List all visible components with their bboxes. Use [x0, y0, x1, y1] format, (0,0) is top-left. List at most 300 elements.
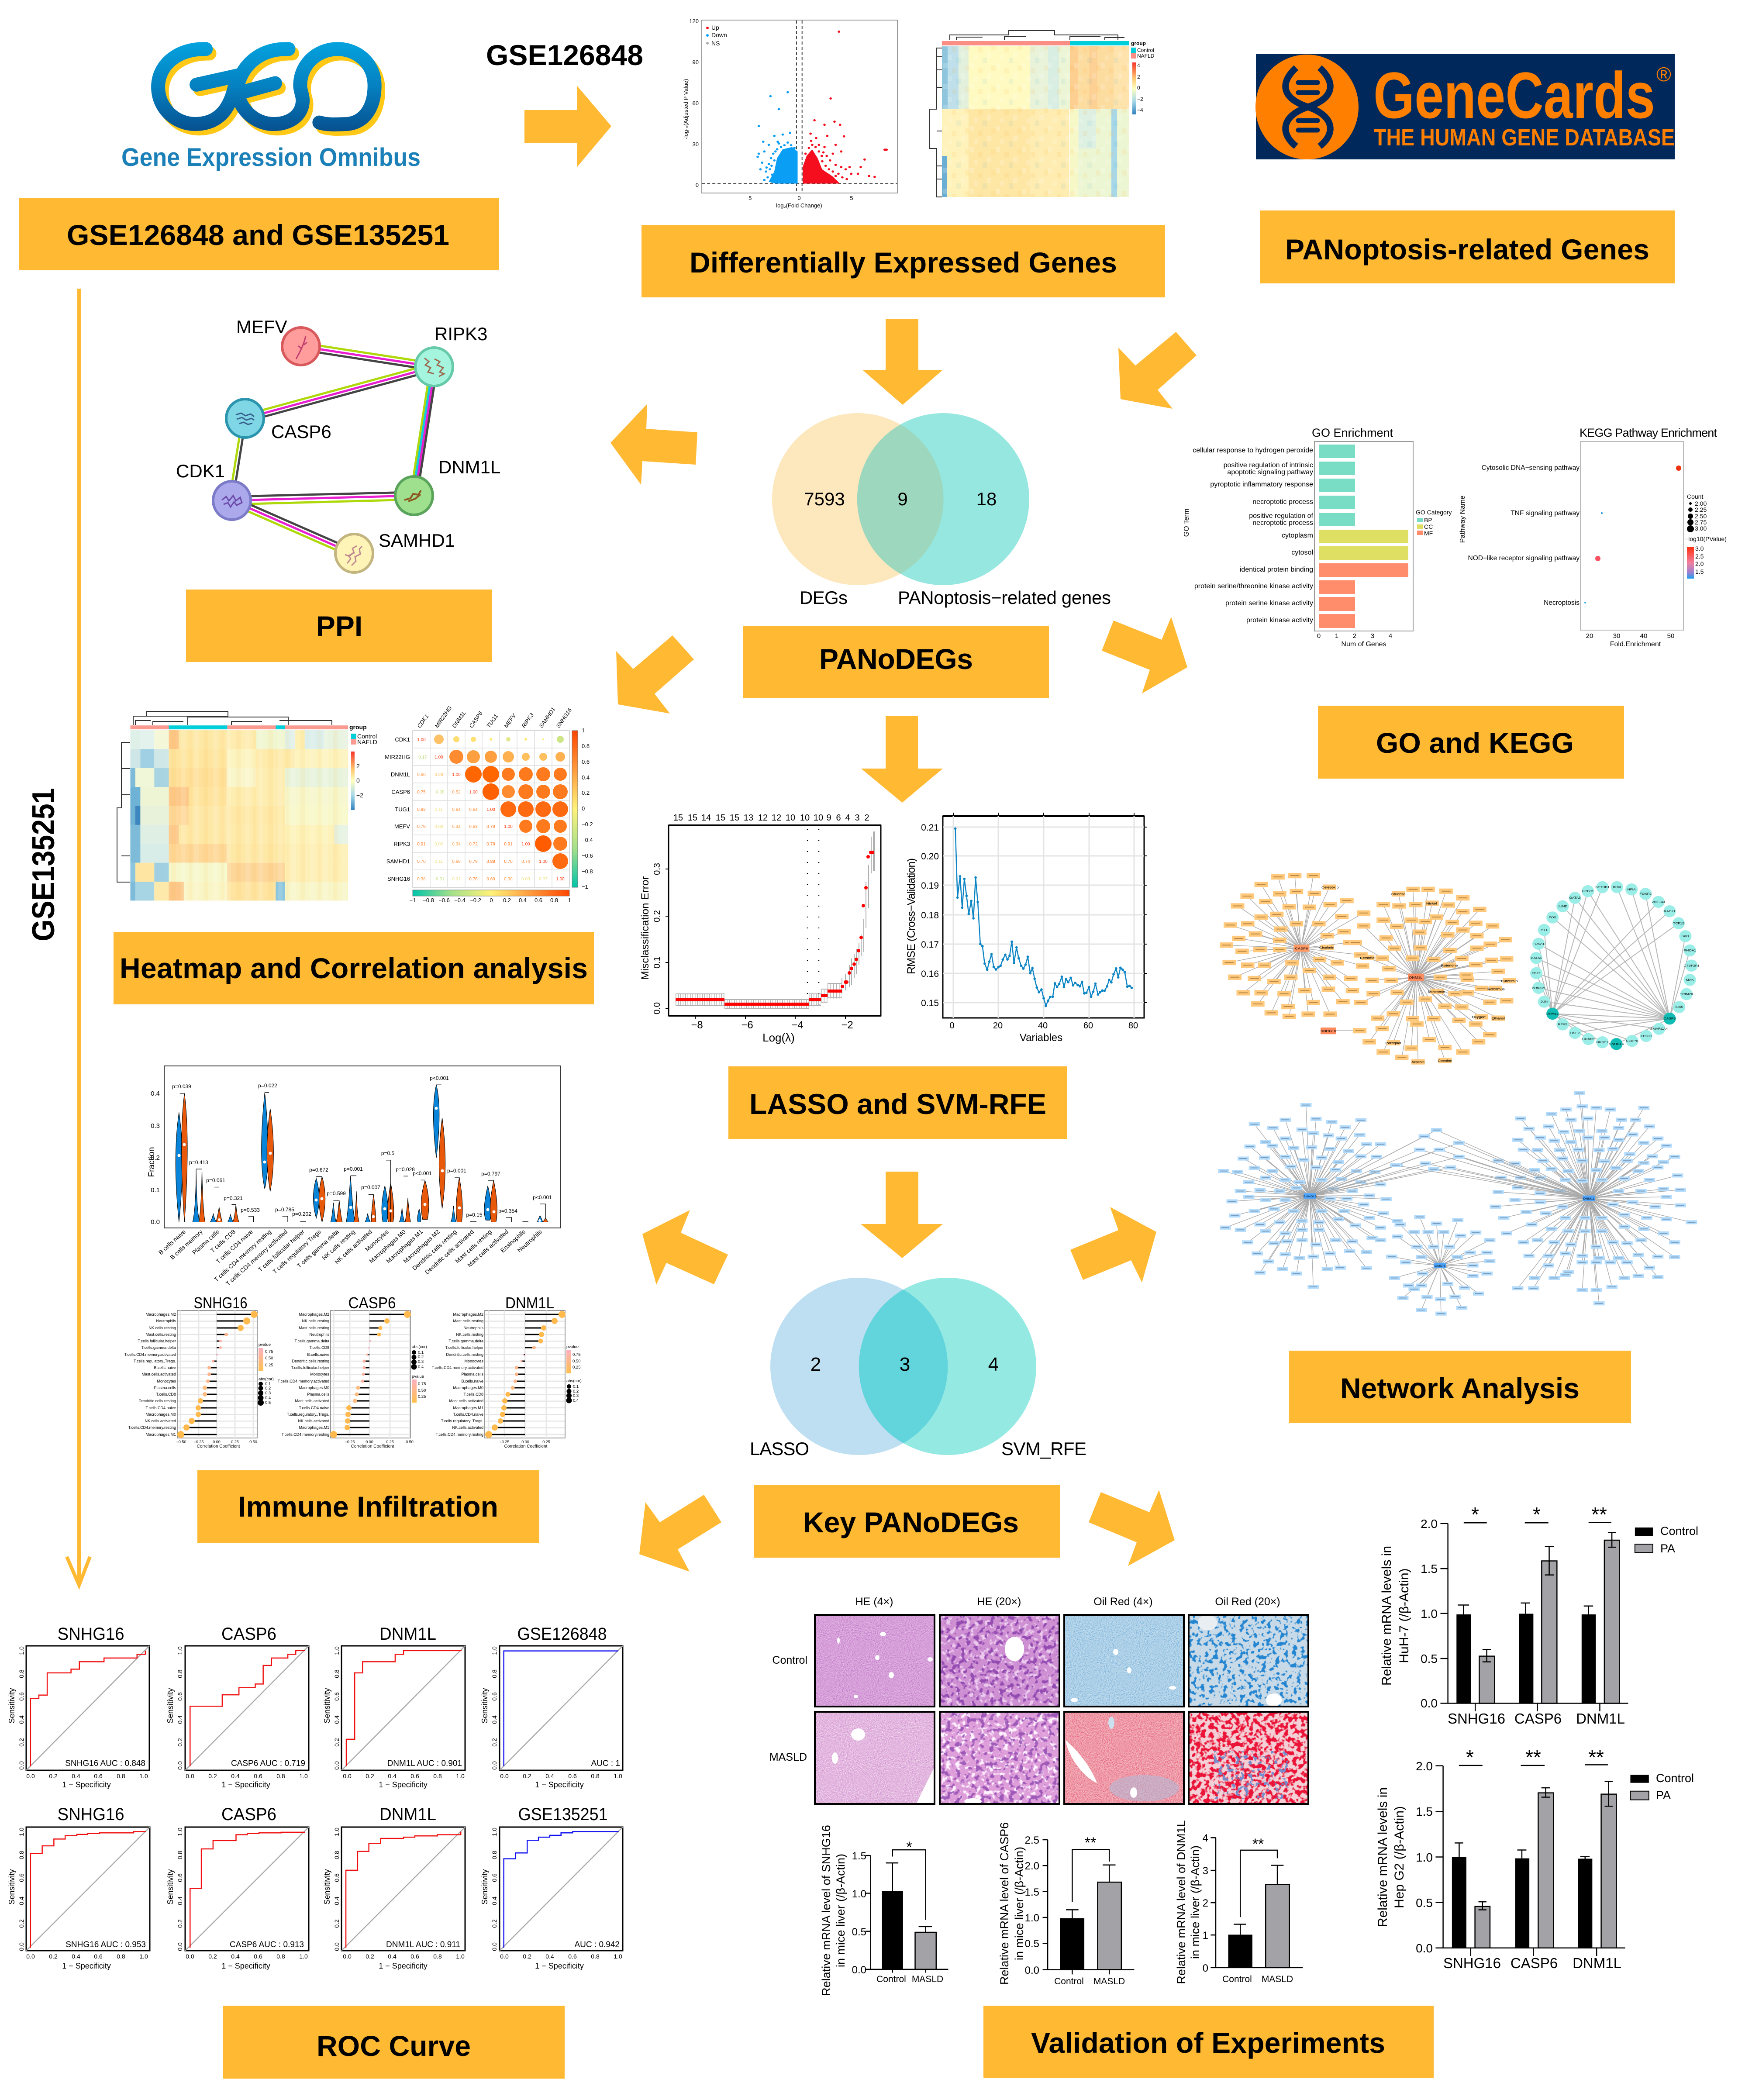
correlation matrix: 0.82: [417, 807, 426, 812]
lollipop chart: DNM1L: T.cells.CD4.memory.resting: [436, 1432, 483, 1437]
ROC curves: 1.0: [491, 1646, 498, 1655]
ROC curves: 0.4: [231, 1953, 240, 1960]
lollipop chart: CASP6: 0.75: [418, 1382, 426, 1386]
banner: GSE126848 and GSE135251: GSE126848 and GSE135251: [67, 219, 449, 251]
venn diagram: DEGs and PANoptosis genes: 18: [976, 489, 997, 509]
bar chart: HuH-7: DNM1L: [1576, 1710, 1625, 1727]
lollipop chart: CASP6: T.cells.CD8: [309, 1345, 329, 1350]
LASSO plot: −2: [841, 1019, 853, 1031]
heatmap: key genes: NAFLD: [357, 738, 377, 745]
network: transcription factors ring: SMARCA4: [1650, 1027, 1668, 1031]
venn diagram: LASSO and SVM-RFE: 4: [988, 1354, 999, 1375]
ROC curves: 1.0: [456, 1772, 465, 1779]
LASSO plot: 0.1: [652, 956, 662, 969]
network: transcription factors ring: HSF2: [1570, 1031, 1580, 1034]
ROC curves: 0.6: [491, 1692, 498, 1701]
ROC curves: 0.8: [276, 1953, 285, 1960]
correlation matrix: −0.8: [423, 897, 434, 903]
ROC curves: 0.2: [18, 1738, 25, 1747]
correlation matrix: 1.00: [539, 859, 548, 864]
ROC curves: 0.8: [18, 1851, 25, 1859]
bar chart: Hep G2: Control: [1656, 1772, 1694, 1785]
GO enrichment bar chart: protein serine kinase activity: [1225, 600, 1313, 607]
LASSO plot: 10: [800, 813, 810, 823]
lollipop chart: DNM1L: Macrophages.M0: [453, 1386, 483, 1390]
ROC curves: 0.0: [333, 1761, 340, 1770]
venn diagram: LASSO and SVM-RFE: 2: [810, 1354, 821, 1375]
KEGG pathway enrichment dot plot: −log10(PValue): [1685, 535, 1727, 542]
lollipop chart: CASP6: 0.50: [406, 1440, 414, 1444]
bar chart: HuH-7: PA: [1660, 1542, 1675, 1555]
ROC curves: 0.8: [333, 1669, 340, 1678]
arrow: down-left to ROC: [639, 1495, 721, 1572]
lollipop chart: DNM1L: 0.00: [521, 1440, 529, 1444]
correlation matrix: −0.8: [582, 868, 593, 875]
LASSO plot: 12: [758, 813, 768, 823]
banner: GO and KEGG: [1318, 706, 1624, 779]
ROC curves: CASP6: [221, 1805, 276, 1824]
violin plot: immune cell fractions: B cells naive: [157, 1228, 187, 1256]
KEGG pathway enrichment dot plot: 2.00: [1695, 500, 1707, 507]
correlation matrix: 0.03: [435, 824, 443, 829]
correlation matrix: 0.88: [486, 859, 495, 864]
KEGG pathway enrichment dot plot: KEGG Pathway Enrichment: [1580, 426, 1717, 439]
ROC curves: 1.0: [139, 1772, 148, 1779]
lollipop chart: SNHG16: 0.25: [265, 1363, 273, 1368]
violin plot: immune cell fractions: p=0.321: [224, 1195, 243, 1201]
venn diagram: DEGs and PANoptosis genes: PANoptosis−related genes: [898, 587, 1111, 608]
correlation matrix: 0.79: [469, 859, 478, 864]
bar chart: Hep G2: SNHG16: [1443, 1955, 1501, 1971]
correlation matrix: 0.01: [452, 877, 461, 882]
bar chart: SNHG16 in mice liver: 1.5: [852, 1850, 866, 1862]
violin plot: immune cell fractions: p=0.599: [327, 1190, 346, 1197]
lollipop chart: DNM1L: pvalue: [566, 1345, 579, 1349]
lollipop chart: SNHG16: Mast.cells.resting: [145, 1332, 176, 1337]
violin plot: immune cell fractions: p=0.15: [466, 1212, 483, 1218]
ROC curves: Sensitivity: [166, 1688, 175, 1724]
bar chart: CASP6 in mice liver: 0.0: [1025, 1965, 1039, 1976]
LASSO plot: 0.0: [652, 1002, 662, 1014]
violin plot: immune cell fractions: Dendritic cells activated: [424, 1228, 475, 1276]
correlation matrix: 0.4: [519, 897, 527, 903]
ROC curves: 0.8: [176, 1851, 183, 1859]
correlation matrix: −1: [410, 897, 416, 903]
ROC curves: 0.6: [568, 1953, 577, 1960]
ROC curves: 0.0: [18, 1761, 25, 1770]
logo: GEO Gene Expression Omnibus: Gene Expression Omnibus: [121, 143, 421, 172]
ROC curves: 0.0: [26, 1953, 35, 1960]
LASSO plot: 10: [814, 813, 823, 823]
lollipop chart: CASP6: Neutrophils: [309, 1332, 329, 1337]
ROC curves: 1 − Specificity: [379, 1780, 428, 1789]
bar chart: DNM1L in mice liver: Control: [1222, 1974, 1252, 1984]
lollipop chart: SNHG16: T.cells.CD4.memory.resting: [128, 1425, 176, 1430]
network: miRNA: DNM1L: [1583, 1198, 1595, 1200]
ROC curves: 1 − Specificity: [535, 1780, 584, 1789]
banner: Network Analysis: Network Analysis: [1340, 1372, 1580, 1404]
lollipop chart: CASP6: Correlation Coefficient: [351, 1444, 394, 1449]
network: genes and chemicals: [1226, 876, 1518, 1064]
LASSO plot: 6: [836, 813, 841, 823]
venn diagram: LASSO and SVM-RFE: LASSO: [750, 1438, 809, 1459]
bar chart: HuH-7: 2.0: [1421, 1517, 1438, 1531]
network: genes and chemicals: Estradiol: [1360, 956, 1375, 960]
correlation matrix: −0.2: [582, 821, 593, 828]
ROC curves: 0.6: [333, 1873, 340, 1882]
ROC curves: 0.2: [176, 1919, 183, 1928]
violin plot: immune cell fractions: 0.0: [151, 1218, 160, 1226]
correlation matrix: 0.78: [469, 877, 478, 882]
correlation matrix: 1.00: [417, 738, 426, 742]
heatmap: key genes: 0: [356, 777, 360, 784]
ROC curves: 0.4: [333, 1715, 340, 1724]
violin plot: immune cell fractions: p<0.001: [413, 1170, 432, 1176]
GO enrichment bar chart: GO Category: [1416, 509, 1452, 516]
ROC curves: SNHG16 AUC : 0.848: [65, 1759, 145, 1768]
lollipop chart: SNHG16: 0.50: [249, 1440, 257, 1444]
violin plot: immune cell fractions: Plasma cells: [191, 1228, 221, 1256]
network: transcription factors ring: FOXP2: [1640, 892, 1652, 896]
bar chart: SNHG16 in mice liver: in mice liver (/β-Actin): [834, 1854, 847, 1967]
ROC curves: 0.0: [343, 1772, 352, 1779]
banner: LASSO and SVM-RFE: LASSO and SVM-RFE: [749, 1088, 1046, 1120]
heatmap: differentially expressed genes: −4: [1137, 107, 1143, 113]
PPI network: MEFV: [236, 317, 287, 337]
GO enrichment bar chart: cytoplasm: [1282, 532, 1313, 539]
lollipop chart: SNHG16: T.cells.CD8: [156, 1392, 176, 1397]
ROC curves: 1 − Specificity: [62, 1780, 111, 1789]
logo: GeneCards: ®: [1656, 63, 1671, 86]
lollipop chart: DNM1L: [432, 1294, 582, 1449]
GO enrichment bar chart: CC: [1424, 523, 1433, 530]
correlation matrix: 0.34: [452, 824, 461, 829]
bar chart: CASP6 in mice liver: 1.5: [1025, 1886, 1039, 1898]
ROC curves: CASP6: [221, 1624, 276, 1644]
KEGG pathway enrichment dot plot: 1.5: [1695, 568, 1704, 575]
correlation matrix: 1: [582, 727, 585, 734]
histology panels: Oil Red (20×): [1215, 1596, 1280, 1608]
heatmap: key genes: Control: [357, 733, 377, 740]
violin plot: immune cell fractions: T cells CD4 memory activated: [224, 1228, 289, 1287]
PPI network: CDK1: [176, 461, 225, 481]
violin plot: immune cell fractions: Macrophages M0: [368, 1228, 407, 1265]
lollipop chart: SNHG16: 0.1: [265, 1382, 271, 1386]
correlation matrix: 0.64: [452, 807, 461, 812]
lollipop chart: DNM1L: T.cells.regulatory..Tregs.: [441, 1419, 483, 1423]
GO enrichment bar chart: 4: [1389, 632, 1392, 640]
correlation matrix: −0.4: [582, 837, 593, 843]
left flow line with arrowhead: GSE135251: [67, 289, 90, 1585]
correlation matrix: SAMHD1: [538, 706, 557, 729]
violin plot: immune cell fractions: p=0.001: [447, 1168, 466, 1174]
venn diagram: DEGs and PANoptosis genes: 9: [897, 489, 908, 509]
lollipop chart: CASP6: Macrophages.M0: [299, 1386, 329, 1390]
ROC curves: 1.0: [333, 1646, 340, 1655]
violin plot: immune cell fractions: p=0.354: [498, 1208, 517, 1214]
lollipop chart: CASP6: T.cells.CD4.memory.resting: [282, 1432, 329, 1437]
bar chart: DNM1L in mice liver: 0: [1203, 1962, 1208, 1974]
violin plot: immune cell fractions: 0.3: [151, 1122, 160, 1130]
bar chart: Hep G2: **: [1525, 1746, 1541, 1769]
banner: Validation of Experiments: [983, 2006, 1434, 2078]
ROC curves: 1 − Specificity: [535, 1962, 584, 1970]
lollipop chart: DNM1L: T.cells.follicular.helper: [445, 1345, 483, 1350]
network: transcription factors ring: CEBPB: [1626, 1039, 1638, 1042]
lollipop chart: SNHG16: [124, 1294, 274, 1449]
correlation matrix: 1.00: [521, 842, 530, 847]
ROC curves: 1.0: [18, 1646, 25, 1655]
KEGG pathway enrichment dot plot: Count: [1687, 493, 1703, 500]
LASSO plot: 10: [786, 813, 795, 823]
network: transcription factors ring: IRX3: [1613, 886, 1621, 889]
lollipop chart: DNM1L: 0.75: [573, 1352, 581, 1357]
ROC curves: 0.8: [18, 1669, 25, 1678]
ROC curves: [7, 1624, 623, 1970]
bar chart: HuH-7: *: [1533, 1503, 1541, 1526]
volcano plot: [683, 18, 897, 209]
histology panels: HE (20×): [977, 1596, 1021, 1608]
network: genes and chemicals: Cocaine: [1438, 1059, 1452, 1062]
LASSO plot: [639, 813, 881, 1044]
bar chart: Hep G2: *: [1466, 1746, 1474, 1769]
GO enrichment bar chart: cytosol: [1291, 549, 1313, 556]
lollipop chart: DNM1L: T.cells.CD4.memory.activated: [432, 1366, 483, 1370]
volcano plot: 120: [689, 18, 699, 24]
lollipop chart: SNHG16: 0.75: [265, 1349, 273, 1354]
network: genes and chemicals: Nickel: [1426, 902, 1437, 905]
correlation matrix: 0.6: [582, 759, 590, 765]
ROC curves: 0.8: [433, 1772, 442, 1779]
GO enrichment bar chart: apoptotic signaling pathway: [1227, 469, 1313, 476]
venn diagram: DEGs and PANoptosis genes: DEGs: [800, 587, 848, 608]
bar chart: HuH-7: HuH-7 (/β-Actin): [1397, 1568, 1411, 1663]
ROC curves: 0.8: [333, 1851, 340, 1859]
GO enrichment bar chart: pyroptotic inflammatory response: [1210, 481, 1313, 488]
GO enrichment bar chart: BP: [1424, 517, 1432, 524]
network: genes and chemicals: Ethanol: [1492, 1017, 1505, 1020]
LASSO plot: 0.2: [652, 910, 662, 922]
bar chart: DNM1L in mice liver: 1: [1203, 1930, 1208, 1941]
network: genes and chemicals: Melatonin: [1428, 990, 1445, 993]
correlation matrix: MIR22HG: [385, 754, 410, 760]
violin plot: immune cell fractions: Monocytes: [364, 1228, 390, 1253]
arrow: up-left to immune infiltration: [642, 1210, 728, 1285]
KEGG pathway enrichment dot plot: TNF signaling pathway: [1511, 510, 1580, 517]
correlation matrix: CDK1: [395, 736, 410, 743]
network: genes and chemicals: SNHG16: [1321, 1029, 1336, 1033]
GO enrichment bar chart: cellular response to hydrogen peroxide: [1193, 447, 1313, 454]
node: CDK1: [213, 481, 251, 520]
network: transcription factors ring: RAD21: [1664, 910, 1676, 913]
network: transcription factors ring: SIX5: [1675, 1005, 1683, 1009]
venn diagram: DEGs and PANoptosis genes: [772, 413, 1111, 608]
ROC curves: Sensitivity: [323, 1688, 331, 1724]
correlation matrix: DNM1L: [391, 771, 410, 778]
correlation matrix: −0.2: [470, 897, 481, 903]
correlation matrix: 0.2: [582, 790, 590, 796]
network: transcription factors ring: FOS: [1549, 916, 1556, 919]
SVM-RFE RMSE line plot: 40: [1038, 1021, 1048, 1031]
lollipop chart: SNHG16: abs(cor): [259, 1377, 274, 1382]
bar chart: HuH-7: 0.5: [1421, 1652, 1438, 1666]
violin plot: immune cell fractions: [147, 1066, 560, 1287]
LASSO plot: Misclassification Error: [639, 876, 651, 980]
network: genes and chemicals: Celecoxib: [1321, 886, 1339, 889]
ROC curves: 1.0: [333, 1828, 340, 1836]
network: transcription factors ring: GATA3: [1569, 896, 1581, 900]
banner: LASSO and SVM-RFE: [728, 1066, 1067, 1139]
logo: GeneCards: [1255, 54, 1675, 159]
KEGG pathway enrichment dot plot: 2.0: [1695, 560, 1704, 567]
lollipop chart: CASP6: 0.00: [366, 1440, 373, 1444]
lollipop chart: SNHG16: 0.50: [265, 1356, 273, 1361]
bar chart: CASP6 in mice liver: 0.5: [1025, 1938, 1039, 1950]
lollipop chart: CASP6: Macrophages.M1: [299, 1425, 329, 1430]
network: genes and chemicals: Rotenone: [1441, 964, 1458, 967]
lollipop chart: SNHG16: T.cells.CD4.memory.activated: [124, 1352, 176, 1357]
lollipop chart: SNHG16: B.cells.naive: [154, 1366, 176, 1370]
network: miRNA: CASP6: [1435, 1265, 1445, 1268]
LASSO plot: −6: [741, 1019, 753, 1031]
PPI network: RIPK3: [435, 324, 487, 344]
banner: PANoDEGs: [743, 626, 1049, 698]
bar chart: SNHG16 in mice liver: [820, 1825, 948, 1996]
ROC curves: 0.0: [500, 1772, 509, 1779]
GO enrichment bar chart: protein serine/threonine kinase activity: [1194, 583, 1313, 590]
lollipop chart: SNHG16: 0.00: [213, 1440, 221, 1444]
lollipop chart: CASP6: T.cells.regulatory..Tregs.: [287, 1412, 329, 1417]
lollipop chart: CASP6: T.cells.follicular.helper: [291, 1366, 329, 1370]
LASSO plot: 14: [701, 813, 711, 823]
LASSO plot: 3: [855, 813, 860, 823]
ROC curves: 0.8: [117, 1772, 125, 1779]
heatmap: differentially expressed genes: [929, 31, 1155, 197]
banner: PANoptosis-related Genes: [1260, 210, 1675, 283]
violin plot: immune cell fractions: 0.2: [151, 1154, 160, 1162]
lollipop chart: DNM1L: abs(cor): [566, 1379, 582, 1383]
lollipop chart: CASP6: 0.3: [418, 1359, 424, 1364]
bar chart: DNM1L in mice liver: **: [1252, 1836, 1264, 1852]
network: transcription factors ring: EP300: [1641, 1034, 1652, 1038]
violin plot: immune cell fractions: p=0.061: [206, 1177, 225, 1183]
ROC curves: 0.2: [523, 1772, 531, 1779]
LASSO plot: 15: [688, 813, 697, 823]
violin plot: immune cell fractions: T cells follicular helper: [257, 1228, 306, 1273]
SVM-RFE RMSE line plot: 0.17: [921, 940, 939, 950]
correlation matrix: 0.11: [435, 807, 443, 812]
violin plot: immune cell fractions: NK cells resting: [321, 1228, 356, 1261]
network: transcription factors ring: CTBF2F1: [1683, 964, 1700, 967]
lollipop chart: SNHG16: T.cells.gamma.delta: [141, 1345, 176, 1350]
lollipop chart: CASP6: [278, 1294, 427, 1449]
lollipop chart: DNM1L: T.cells.CD4.naive: [453, 1412, 483, 1417]
LASSO plot: 0.3: [652, 863, 662, 875]
ROC curves: 0.2: [491, 1738, 498, 1747]
SVM-RFE RMSE line plot: 0.16: [921, 969, 939, 979]
LASSO plot: 4: [845, 813, 850, 823]
lollipop chart: SNHG16: Dendritic.cells.resting: [138, 1399, 176, 1403]
network: transcription factors ring: EBF1: [1532, 971, 1541, 975]
correlation matrix: −0.6: [582, 852, 593, 859]
ROC curves: Sensitivity: [480, 1869, 489, 1905]
ROC curves: 0.8: [117, 1953, 125, 1960]
volcano plot: 0: [696, 182, 699, 188]
ROC curves: 0.4: [545, 1953, 554, 1960]
lollipop chart: CASP6: 0.25: [418, 1394, 426, 1399]
network: transcription factors ring: HOXD9: [1582, 1037, 1595, 1041]
correlation matrix: RIPK3: [520, 712, 535, 729]
venn diagram: LASSO and SVM-RFE: [750, 1278, 1086, 1459]
lollipop chart: SNHG16: Plasma.cells: [154, 1386, 176, 1390]
network: transcription factors ring: JUND: [1558, 904, 1568, 908]
lollipop chart: DNM1L: T.cells.CD8: [463, 1392, 483, 1397]
SVM-RFE RMSE line plot: 80: [1128, 1021, 1138, 1031]
violin plot: immune cell fractions: p=0.028: [396, 1166, 415, 1172]
ROC curves: 1.0: [176, 1646, 183, 1655]
volcano plot: 30: [693, 141, 699, 148]
network: transcription factors ring: FOXA1: [1533, 942, 1545, 945]
histology panels: [769, 1596, 1308, 1804]
network: genes and chemicals: Oxygen: [1472, 1015, 1485, 1019]
lollipop chart: DNM1L: Dendritic.cells.resting: [446, 1352, 483, 1357]
GO enrichment bar chart: MF: [1424, 530, 1433, 537]
arrow: down-right to validation: [1089, 1490, 1175, 1566]
venn diagram: LASSO and SVM-RFE: 3: [900, 1354, 910, 1375]
volcano plot: log₂(Fold Change): [776, 202, 822, 209]
LASSO plot: 15: [673, 813, 683, 823]
PPI network: SAMHD1: [379, 530, 455, 551]
correlation matrix: 0.79: [417, 824, 426, 829]
KEGG pathway enrichment dot plot: 3.00: [1695, 525, 1707, 532]
SVM-RFE RMSE line plot: 0.19: [921, 881, 939, 891]
ROC curves: 0.6: [491, 1873, 498, 1882]
bar chart: CASP6 in mice liver: Relative mRNA level of CASP6: [998, 1822, 1011, 1985]
correlation matrix: RIPK3: [393, 841, 410, 847]
correlation matrix: −1: [582, 883, 588, 890]
ROC curves: 0.0: [491, 1942, 498, 1951]
ROC curves: 0.4: [388, 1953, 397, 1960]
banner: ROC Curve: [223, 2006, 565, 2079]
banner: Key PANoDEGs: [754, 1485, 1060, 1558]
lollipop chart: DNM1L: 0.3: [573, 1393, 579, 1398]
correlation matrix: CDK1: [416, 713, 430, 729]
correlation matrix: 1.00: [504, 824, 513, 829]
KEGG pathway enrichment dot plot: 2.25: [1695, 506, 1707, 513]
ROC curves: 0.2: [18, 1919, 25, 1928]
node: MEFV: [282, 328, 320, 365]
violin plot: immune cell fractions: p=0.533: [241, 1207, 260, 1213]
lollipop chart: CASP6: −0.25: [345, 1440, 355, 1444]
ROC curves: GSE135251: [518, 1805, 608, 1824]
correlation matrix: 0.28: [435, 772, 443, 777]
violin plot: immune cell fractions: T cells regulatory Tregs: [272, 1228, 322, 1275]
ROC curves: Sensitivity: [166, 1869, 175, 1905]
ROC curves: 0.0: [343, 1953, 352, 1960]
lollipop chart: DNM1L: Macrophages.M1: [453, 1406, 483, 1410]
lollipop chart: SNHG16: T.cells.follicular.helper: [138, 1339, 176, 1343]
correlation matrix: −0.6: [438, 897, 450, 903]
network: transcription factors ring: JUN: [1541, 1000, 1548, 1003]
ROC curves: 1.0: [299, 1953, 308, 1960]
bar chart: HuH-7: Control: [1660, 1524, 1698, 1538]
network: transcription factors ring: NR3C1: [1597, 1041, 1608, 1044]
correlation matrix: 0.79: [486, 824, 495, 829]
violin plot: immune cell fractions: T cells gamma delta: [296, 1228, 340, 1269]
violin plot: immune cell fractions: Neutrophils: [516, 1228, 543, 1254]
lollipop chart: SNHG16: 0.2: [265, 1386, 271, 1391]
banner: Differentially Expressed Genes: Differentially Expressed Genes: [690, 246, 1117, 279]
